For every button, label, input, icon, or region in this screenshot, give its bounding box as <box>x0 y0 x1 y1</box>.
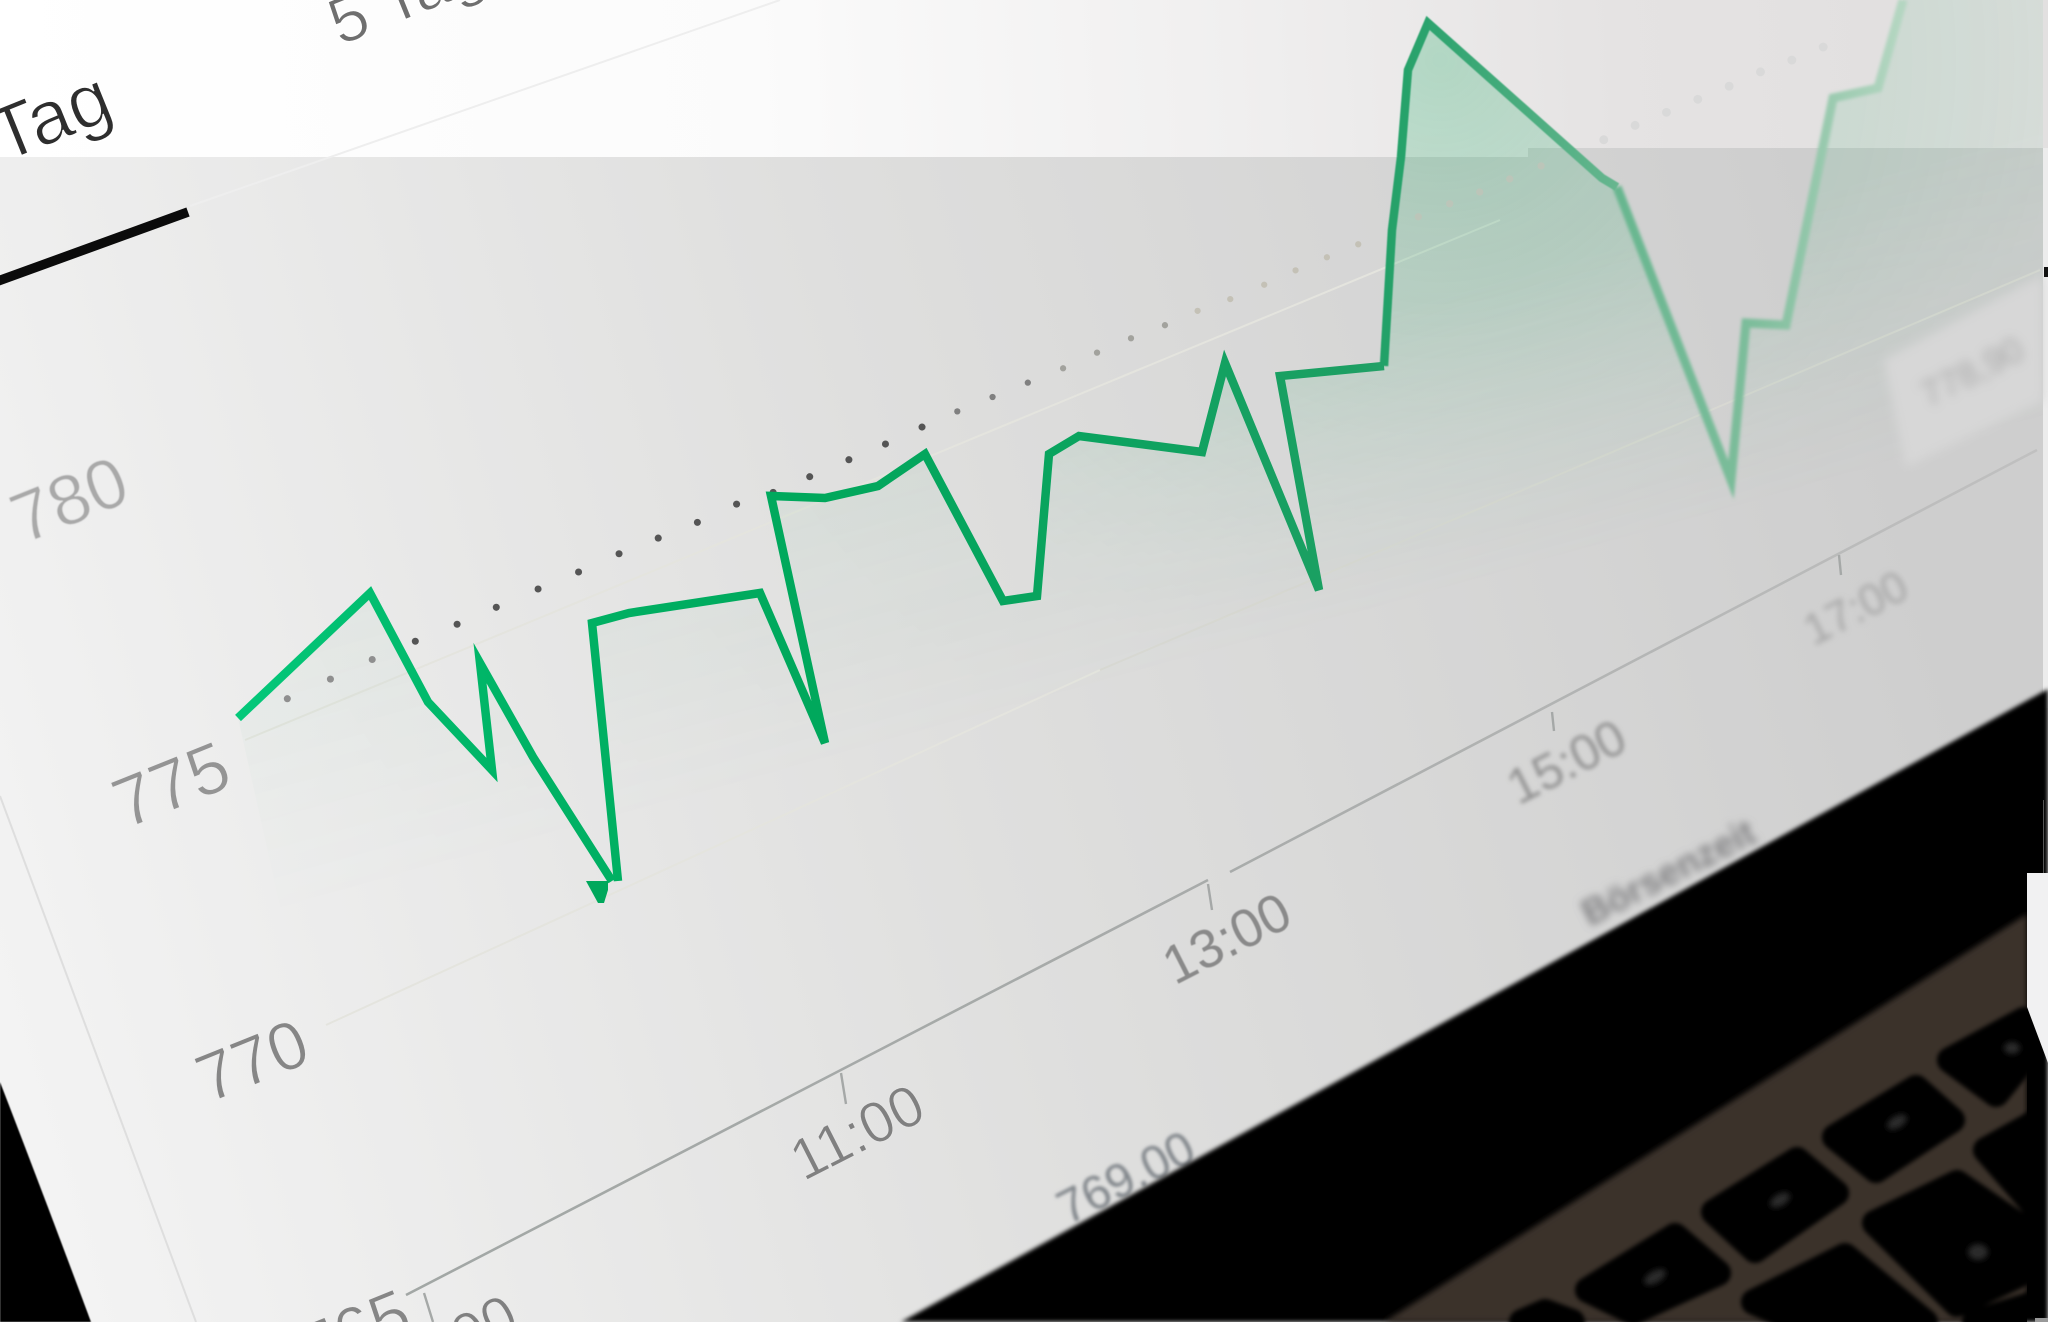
time label 15:00: 15:00 <box>1498 709 1635 815</box>
low price label: 769.00 <box>1049 1121 1204 1235</box>
keyboard keys <box>1522 1020 2040 1322</box>
blurred price tooltip <box>1884 275 2043 467</box>
time label 11:00: 11:00 <box>780 1072 935 1193</box>
label 780: 780 <box>0 442 139 559</box>
label 775: 775 <box>102 727 241 844</box>
active tab underline <box>0 212 188 284</box>
laptop bezel, bottom <box>901 689 2048 1322</box>
axis line <box>406 450 2037 1295</box>
period tabs <box>0 0 494 284</box>
time label 13:00: 13:00 <box>1153 881 1301 996</box>
keyboard deck <box>1384 914 2027 1322</box>
time label 17:00: 17:00 <box>1796 562 1916 655</box>
right edge strip <box>2027 267 2048 1322</box>
axis ticks <box>424 555 1841 1322</box>
label 770: 770 <box>186 1004 319 1117</box>
keyboard <box>1384 914 2040 1322</box>
previous close dotted line <box>284 43 1828 702</box>
y axis labels <box>0 442 421 1322</box>
x axis <box>406 450 2037 1322</box>
key legends <box>1642 1042 2020 1288</box>
laptop bezel, left <box>0 1082 91 1322</box>
blurred price tooltip: 778,90 <box>1913 328 2030 415</box>
blurred footer caption: Börsenzeit <box>1575 811 1762 934</box>
area fill under the price line <box>354 0 2043 615</box>
green price line <box>238 0 1903 903</box>
